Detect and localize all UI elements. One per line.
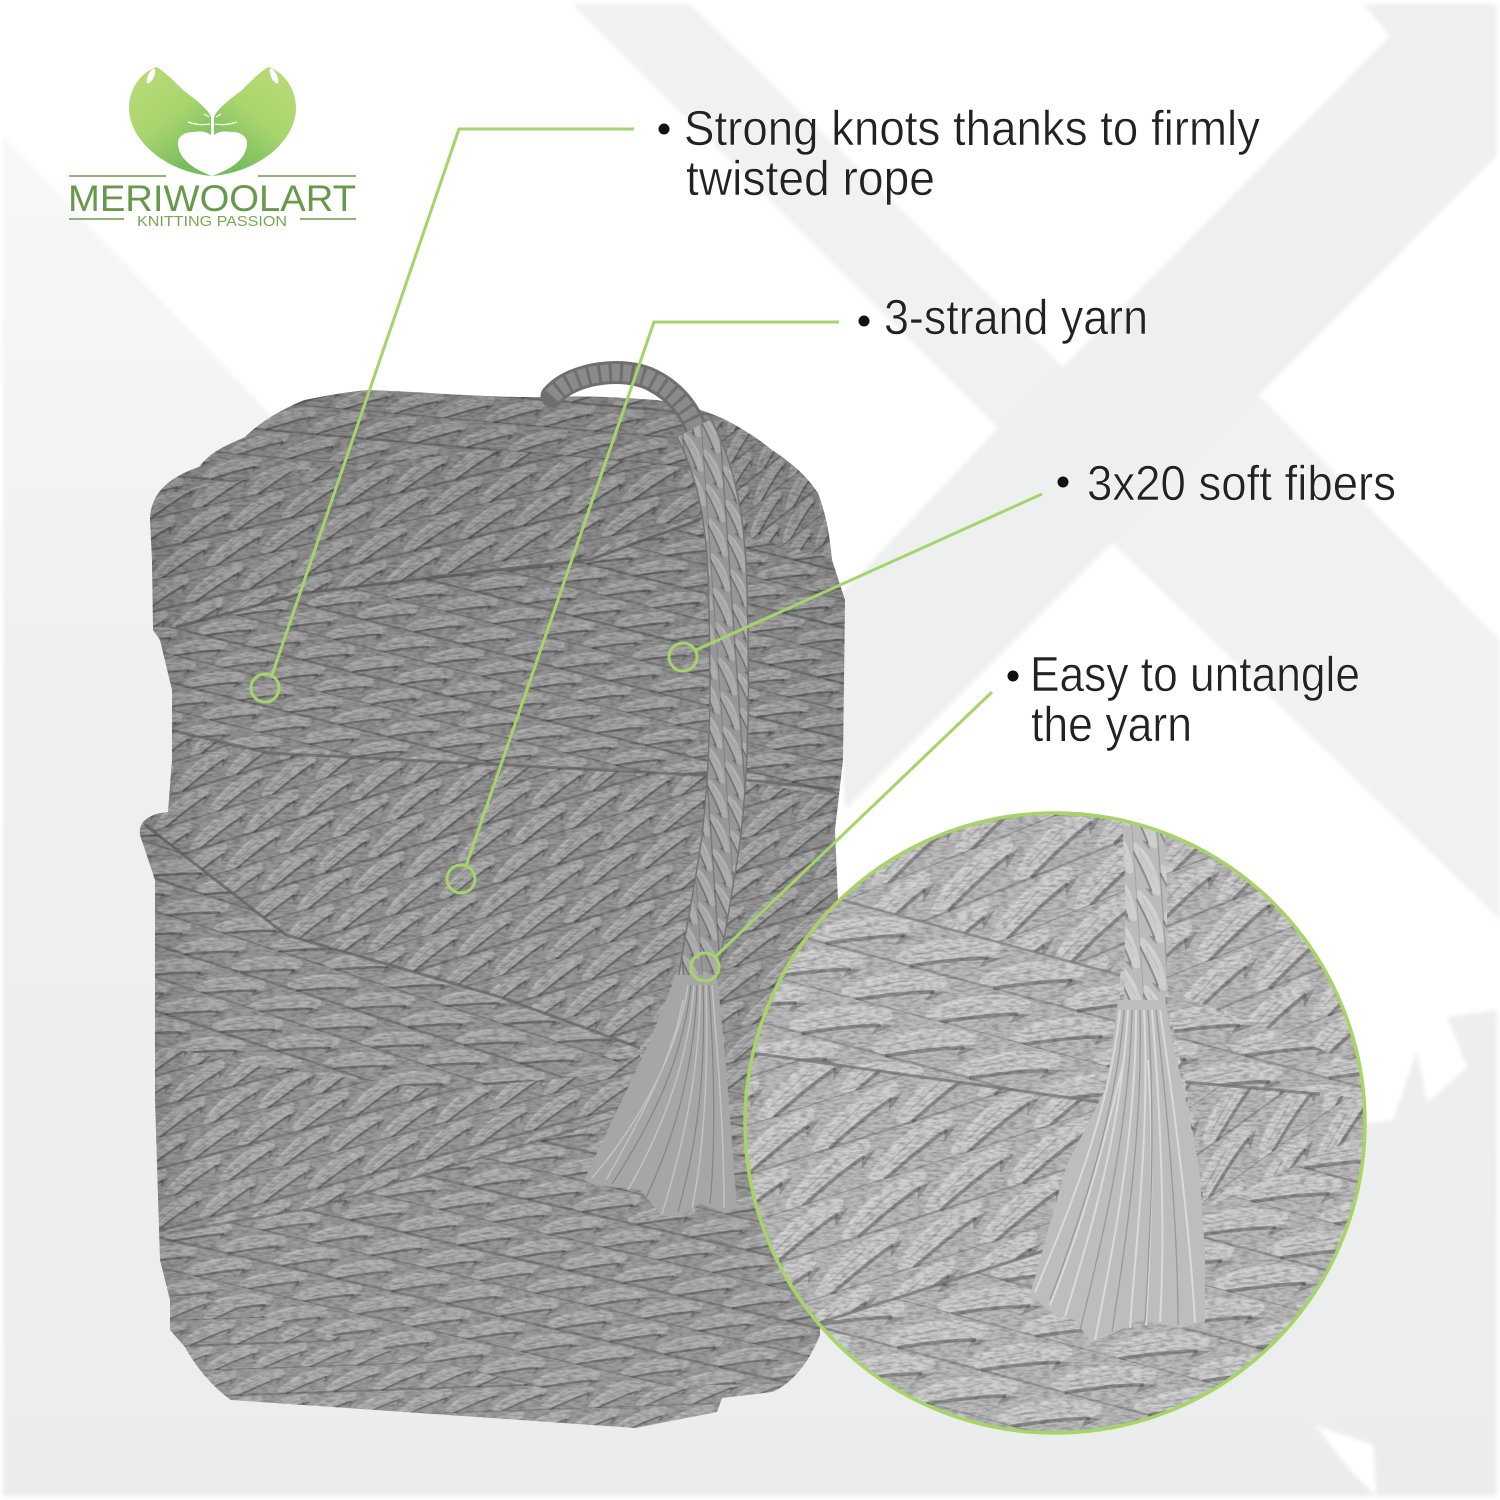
bullet	[658, 124, 670, 134]
magnified hanging rope	[1141, 815, 1146, 1080]
leader line	[272, 129, 634, 675]
leader line	[696, 494, 1042, 650]
callout: 3-strand yarn	[447, 291, 1148, 893]
hanging rope	[694, 428, 729, 990]
callout text: 3-strand yarn	[884, 291, 1148, 345]
bullet	[1058, 476, 1068, 488]
callout text: twisted rope	[686, 152, 935, 206]
logo tagline: KNITTING PASSION	[137, 213, 287, 230]
diagonal band of the X, top left to right	[572, 4, 1500, 920]
marker	[691, 953, 719, 981]
callout: strong knots	[251, 102, 1260, 702]
callout text: Strong knots thanks to firmly	[684, 102, 1260, 156]
callout text: Easy to untangle	[1030, 648, 1360, 702]
callout text: 3x20 soft fibers	[1087, 457, 1396, 511]
marker	[669, 643, 697, 671]
spool rope windings	[130, 380, 860, 1450]
magnified windings	[740, 810, 1380, 1440]
bullet	[858, 316, 870, 326]
inset green ring	[745, 813, 1365, 1433]
diagonal band of the X, top right to left	[835, 4, 1497, 810]
rope tassel	[584, 975, 737, 1216]
pale light patches on the floor	[1315, 1425, 1376, 1496]
callout text: the yarn	[1031, 698, 1192, 752]
logo: Meriwoolart	[68, 67, 356, 230]
loose rope arch at top	[552, 373, 700, 440]
leader line	[466, 322, 839, 866]
yarn spool	[130, 373, 860, 1450]
callout text	[684, 102, 1260, 206]
callout text	[1030, 648, 1360, 752]
magnified tassel	[1030, 1000, 1205, 1343]
marker	[447, 865, 475, 893]
bullet	[1008, 670, 1018, 682]
marker	[251, 674, 279, 702]
callout: easy to untangle	[691, 648, 1360, 981]
icon: two horse heads forming a heart	[129, 67, 296, 176]
leader line	[715, 692, 992, 957]
panel: magnified rope detail	[740, 810, 1380, 1440]
callout: soft fibers	[669, 457, 1396, 671]
logo wordmark: MERIWOOLART	[68, 178, 356, 219]
